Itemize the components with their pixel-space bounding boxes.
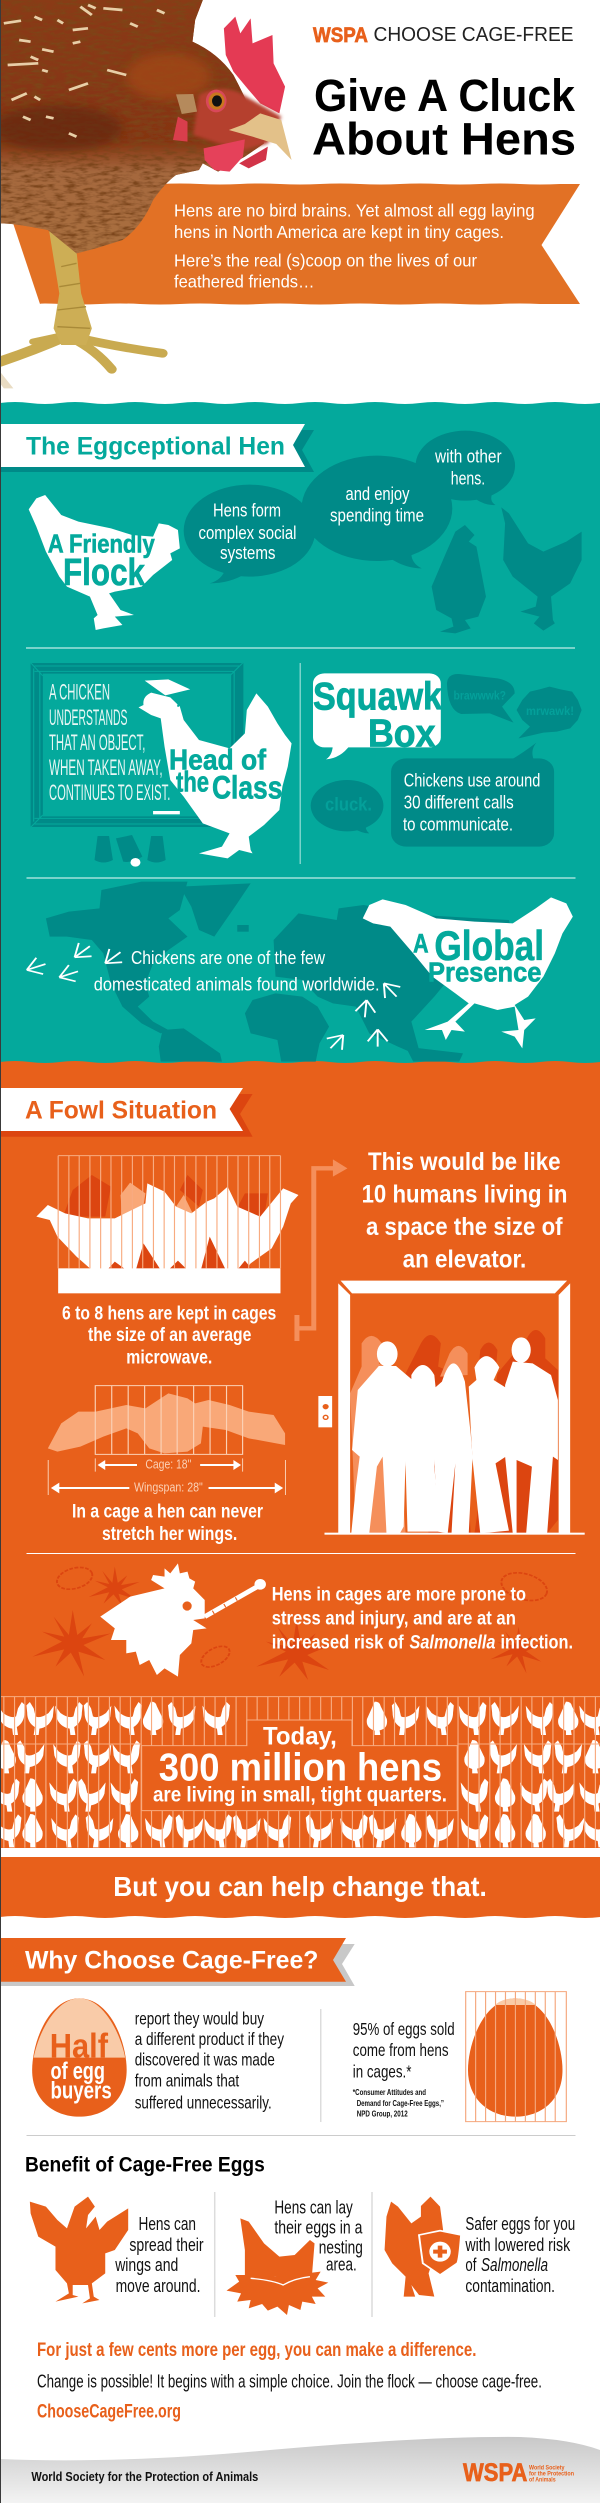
divider — [320, 2009, 322, 2122]
divider — [26, 2135, 576, 2136]
icon: graduate hen — [139, 679, 292, 858]
logo: WSPA: WSPA — [313, 24, 368, 47]
text: bubbles: hens. — [451, 469, 485, 489]
icon: white hen — [29, 495, 180, 630]
hen face — [193, 89, 281, 150]
hens front — [36, 1183, 298, 1270]
text: spread wings: spread their — [129, 2235, 204, 2255]
label: Squawk Box: Box — [368, 713, 436, 756]
icon: egg — [32, 1998, 127, 2117]
text: spread wings — [114, 2214, 204, 2296]
icon: hen in nest — [227, 2218, 328, 2315]
text: buyers — [135, 2008, 284, 2112]
text: stress — [272, 1584, 573, 1653]
text: cage: microwave. — [126, 1346, 212, 1368]
label: half of egg buyers: Half — [50, 2027, 109, 2065]
bubbles: dark calls — [311, 674, 582, 847]
text: safer eggs — [465, 2214, 575, 2296]
divider — [26, 1553, 576, 1554]
arrow: cage to elevator — [297, 1159, 347, 1341]
heading: Why Choose Cage-Free? — [0, 1938, 355, 1986]
label: A Global Presence: Presence — [428, 957, 542, 988]
text: intro: Hens are no bird brains. Yet almost all egg laying — [174, 201, 535, 221]
label: Head of the Class: Class — [212, 769, 282, 805]
text: cage: the size of an average — [88, 1324, 252, 1346]
logo: WSPA footer: for the Protection — [529, 2471, 574, 2478]
text: nesting: Hens can lay — [274, 2197, 353, 2217]
text: safer eggs: contamination. — [465, 2276, 555, 2296]
banner: help change: But you can help change that. — [113, 1871, 487, 1902]
panel: spread wings — [30, 2197, 204, 2303]
ribbon: intro — [0, 184, 580, 304]
text: stretch wings: In a cage a hen can never — [72, 1500, 263, 1522]
logo: WSPA footer — [463, 2459, 574, 2487]
panel: 300 million hens — [0, 1697, 600, 1848]
icon: white hen — [363, 897, 573, 1048]
text: measures: Cage: 18" — [145, 1456, 192, 1471]
text: nesting: nesting — [319, 2237, 363, 2257]
people front — [351, 1337, 558, 1533]
panel: a global presence — [23, 882, 573, 1062]
text: bubbles: spending time — [330, 506, 424, 526]
text: intro — [174, 201, 535, 292]
bubbles: dark speech — [184, 431, 515, 583]
text: 300 million hens: 300 million hens — [159, 1747, 442, 1790]
text: measures — [134, 1456, 203, 1495]
text: calls — [325, 688, 574, 815]
logo: WSPA footer: World Society — [529, 2464, 565, 2471]
text: safer eggs: of — [465, 2255, 477, 2275]
text: buyers: discovered it was made — [135, 2050, 275, 2070]
text: buyers: from animals that — [135, 2071, 239, 2091]
text: cage: 6 to 8 hens are kept in cages — [62, 1302, 276, 1324]
hen leg — [0, 230, 163, 388]
label: A Friendly Flock — [48, 529, 155, 594]
elevator buttons — [318, 1396, 332, 1427]
people behind — [350, 1336, 406, 1533]
panel: safer eggs — [385, 2197, 575, 2297]
cage bars — [0, 1697, 600, 1848]
icons: footprints — [23, 940, 404, 1054]
heading: A Fowl Situation: A Fowl Situation — [25, 1096, 217, 1124]
text: stretch wings: stretch her wings. — [102, 1523, 237, 1545]
panel: cage of hens — [36, 1156, 298, 1368]
label: A Global Presence: Global — [434, 922, 544, 969]
text: stress: increased risk of — [272, 1631, 404, 1653]
panel: half of egg buyers — [32, 1998, 284, 2117]
text: calls: mrwawk! — [526, 704, 574, 718]
panel: nesting — [227, 2197, 363, 2315]
hens pattern — [0, 1702, 600, 1847]
callout: elevator comparison: This would be like — [368, 1148, 561, 1176]
cage tray — [58, 1268, 280, 1293]
text: buyers: a different product if they — [135, 2029, 284, 2049]
text: 95 percent: come from hens — [353, 2040, 449, 2060]
label: A Global Presence: A — [413, 929, 429, 959]
logo: WSPA footer: WSPA — [463, 2459, 527, 2487]
icon: hen with shield — [385, 2197, 461, 2297]
text: safer eggs: Salmonella — [481, 2255, 548, 2275]
call to action: For just a few cents more per egg, you can make a difference. — [37, 2340, 476, 2361]
panel: elevator — [318, 1281, 585, 1535]
text: spread wings: wings and — [114, 2255, 178, 2275]
text: cage — [62, 1302, 276, 1368]
text: nesting: their eggs in a — [274, 2217, 363, 2237]
text: bubbles: systems — [220, 543, 276, 563]
label: half of egg buyers — [50, 2027, 112, 2104]
text: bubbles: complex social — [198, 523, 296, 543]
text: source: NPD Group, 2012 — [357, 2109, 408, 2119]
icon: cups and ball — [95, 835, 166, 867]
footer: World Society for the Protection of Animals — [31, 2469, 258, 2484]
text: intro: hens in North America are kept in tiny cages. — [174, 222, 504, 242]
label: Head of the Class: the — [176, 767, 209, 799]
text: worldwide: domesticated animals found worldwide. — [94, 975, 380, 995]
text: 30 calls: to communicate. — [403, 815, 513, 835]
text: chalk: UNDERSTANDS — [49, 705, 127, 730]
text: bubbles: with other — [434, 447, 502, 467]
hens behind — [63, 1175, 268, 1218]
label: half of egg buyers: of egg — [50, 2058, 105, 2085]
panel: 95 percent — [353, 1992, 566, 2122]
text: 300 million hens: are living in small, tight quarters. — [153, 1784, 447, 1807]
text: spread wings: move around. — [116, 2276, 200, 2296]
title — [312, 70, 576, 164]
title: About Hens — [312, 114, 576, 164]
text: worldwide — [94, 948, 380, 995]
elevator frame — [324, 1281, 585, 1535]
text: chalk: CONTINUES TO EXIST. — [49, 780, 170, 805]
text: calls: brawwwk? — [454, 688, 506, 702]
hen body — [0, 0, 264, 253]
icon: hen with wings — [30, 2197, 128, 2303]
text: calls: cluck. — [325, 795, 372, 815]
heading: A Fowl Situation — [0, 1088, 253, 1137]
text: 95 percent: in cages.* — [353, 2061, 412, 2081]
text: stretch wings — [72, 1500, 263, 1545]
call to action — [37, 2340, 542, 2422]
hen comb — [224, 17, 285, 113]
bubble: white — [313, 673, 441, 759]
logo: WSPA footer: of Animals — [529, 2477, 556, 2484]
panel: wingspan diagram — [48, 1386, 285, 1545]
callout: elevator comparison: 10 humans living in — [362, 1180, 568, 1208]
text: nesting: area. — [326, 2255, 357, 2275]
bursts and germs — [33, 1563, 551, 1680]
text: bubbles: and enjoy — [346, 484, 410, 504]
text: nesting — [274, 2197, 363, 2275]
text: source: Demand for Cage-Free Eggs,” — [357, 2098, 444, 2108]
text: measures: Wingspan: 28" — [134, 1480, 203, 1495]
text: 300 million hens: Today, — [263, 1723, 337, 1750]
text: stress: Salmonella — [410, 1631, 496, 1653]
label: A Friendly Flock: Flock — [63, 552, 146, 594]
measure arrows — [48, 1458, 285, 1495]
photo: hen — [0, 0, 292, 388]
callout: elevator comparison — [362, 1148, 568, 1273]
text: chalk: A CHICKEN — [49, 679, 110, 704]
label: Head of the Class: Head of — [169, 744, 266, 776]
banner: help change — [0, 1857, 600, 1918]
text: stress: infection. — [500, 1631, 573, 1653]
panel: a friendly flock — [29, 431, 582, 633]
left edge line — [0, 0, 1, 2503]
text: 30 calls: Chickens use around — [404, 771, 540, 791]
panel: header — [0, 0, 580, 388]
callout: elevator comparison: an elevator. — [403, 1245, 526, 1273]
footer — [0, 2437, 600, 2503]
text: safer eggs: with lowered risk — [465, 2235, 571, 2255]
text: stress: Hens in cages are more prone to — [272, 1584, 526, 1606]
cage outline — [95, 1386, 243, 1454]
panel: head of the class — [31, 663, 292, 867]
text: intro: feathered friends… — [174, 272, 315, 292]
map: world — [46, 882, 513, 1062]
chalkboard — [31, 663, 243, 827]
panel: squawk box — [311, 673, 582, 847]
text: 30 calls — [403, 771, 540, 835]
heading: The Eggceptional Hen: The Eggceptional Hen — [26, 433, 285, 461]
icon: dark hens — [432, 507, 582, 633]
text: 300 million hens — [153, 1723, 447, 1807]
panel: orange section — [0, 1061, 600, 1848]
label: Squawk Box — [313, 675, 442, 756]
panel: sick hen — [33, 1563, 573, 1680]
text: buyers: suffered unnecessarily. — [135, 2092, 272, 2112]
icon: wings — [48, 1393, 285, 1453]
cage bars — [58, 1156, 280, 1268]
text: chalk: WHEN TAKEN AWAY, — [49, 755, 163, 780]
call to action: ChooseCageFree.org — [37, 2401, 181, 2422]
text: bubbles — [198, 447, 502, 563]
label: A Global Presence — [413, 922, 544, 988]
label: Head of the Class — [169, 744, 282, 805]
center panel — [142, 1720, 457, 1811]
text: source: *Consumer Attitudes and — [353, 2087, 426, 2097]
heading: Why Choose Cage-Free?: Why Choose Cage-Free? — [25, 1946, 318, 1974]
heading: Benefit of Cage-Free Eggs: Benefit of Cage-Free Eggs — [25, 2154, 265, 2177]
label: half of egg buyers: buyers — [50, 2077, 112, 2104]
heading: The Eggceptional Hen — [0, 424, 314, 472]
divider — [26, 647, 575, 649]
divider — [26, 877, 576, 879]
icon: thermometer — [205, 1579, 266, 1617]
title: Give A Cluck — [314, 70, 576, 121]
text: 95 percent — [353, 2019, 455, 2081]
text: intro: Here’s the real (s)coop on the lives of our — [174, 251, 477, 271]
text: chalk: THAT AN OBJECT, — [49, 730, 145, 755]
text: choose cage-free: CHOOSE CAGE-FREE — [374, 24, 574, 46]
panel: teal section — [0, 402, 600, 1063]
text: worldwide: Chickens are one of the few — [131, 948, 326, 968]
text: 95 percent: 95% of eggs sold — [353, 2019, 455, 2039]
text: stress: stress and injury, and are at an — [272, 1607, 516, 1629]
label: Squawk Box: Squawk — [313, 675, 442, 718]
divider — [215, 2192, 372, 2317]
label: A Friendly Flock: A Friendly — [48, 529, 155, 559]
text: 30 calls: 30 different calls — [404, 792, 514, 812]
text: chalk — [49, 679, 170, 805]
text: spread wings: Hens can — [138, 2214, 196, 2234]
callout: elevator comparison: a space the size of — [366, 1213, 563, 1241]
icon: caged egg — [466, 1992, 566, 2122]
icon: sick hen — [100, 1563, 207, 1677]
text: source — [353, 2087, 444, 2119]
text: bubbles: Hens form — [213, 501, 281, 521]
text: buyers: report they would buy — [135, 2008, 264, 2028]
